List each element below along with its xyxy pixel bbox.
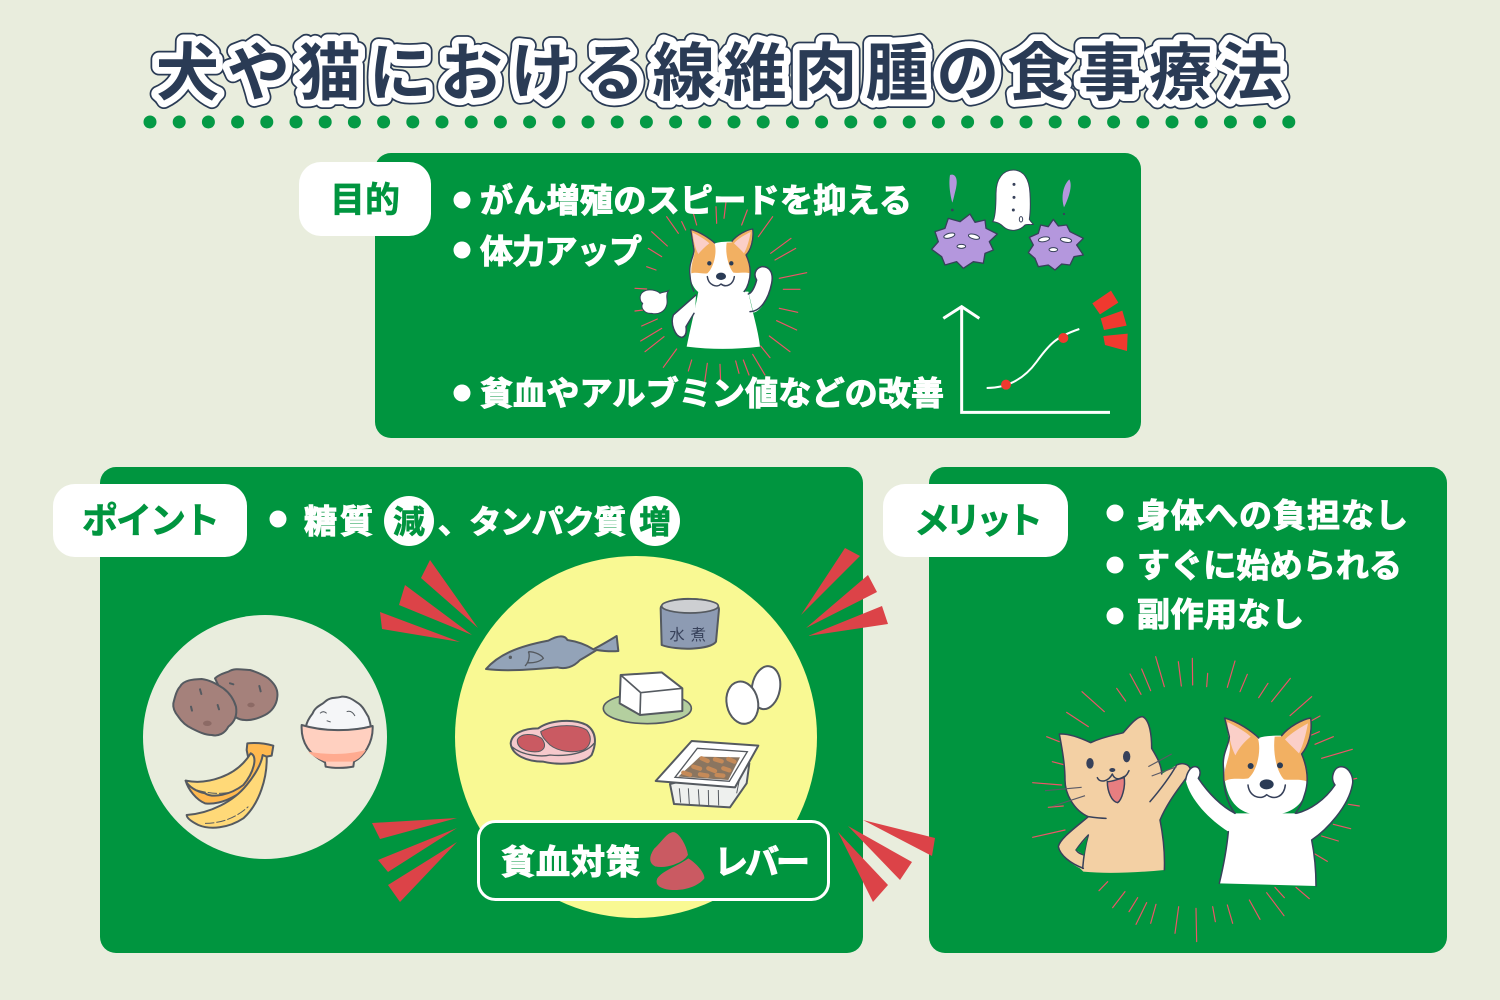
icon: canned tuna: 水煮 bbox=[669, 627, 706, 644]
icon: red emphasis wedges bbox=[372, 548, 935, 902]
icon: eggs bbox=[723, 664, 784, 727]
panel: points bbox=[53, 467, 863, 953]
callout: liver for anemia: レバー bbox=[714, 844, 810, 882]
icon: tofu bbox=[603, 672, 691, 724]
merit text: no burden: 身体への負担なし bbox=[1137, 497, 1408, 534]
circle: foods to reduce bbox=[143, 615, 387, 859]
point text: less sugar, more protein: 糖質 bbox=[304, 503, 373, 540]
icon: canned tuna bbox=[661, 599, 719, 649]
icon: meat bbox=[511, 721, 595, 764]
panel: merits bbox=[883, 467, 1447, 953]
title: 犬や猫における線維肉腫の食事療法 bbox=[156, 39, 1283, 109]
cat bbox=[1045, 717, 1190, 873]
illustration: weakened cancer cells bbox=[932, 170, 1083, 270]
point text: less sugar, more protein: 、タンパク質 bbox=[438, 504, 626, 540]
label: merits: メリット bbox=[914, 500, 1043, 541]
icon: fish bbox=[486, 636, 618, 670]
icon: liver bbox=[650, 832, 704, 890]
callout: liver for anemia: 貧血対策 bbox=[501, 844, 640, 882]
chart: rising line bbox=[943, 291, 1128, 412]
merit text: start right away: すぐに始められる bbox=[1137, 547, 1402, 584]
icon: bananas bbox=[186, 743, 273, 828]
label: merits bbox=[883, 484, 1068, 557]
callout: liver for anemia bbox=[478, 822, 828, 900]
label: points bbox=[53, 484, 247, 557]
purpose text: slow cancer growth: がん増殖のスピードを抑える bbox=[480, 182, 912, 219]
point text: less sugar, more protein: 増 bbox=[639, 504, 671, 540]
label: purpose bbox=[299, 162, 431, 236]
label: points: ポイント bbox=[82, 500, 220, 541]
illustration: cat and dog high five bbox=[1033, 657, 1359, 942]
label: purpose: 目的 bbox=[330, 181, 400, 220]
purpose text: build strength: 体力アップ bbox=[480, 233, 642, 270]
title: 犬や猫における線維肉腫の食事療法 bbox=[156, 39, 1283, 109]
merit text: no side effects: 副作用なし bbox=[1137, 596, 1304, 633]
illustration: proud corgi bbox=[635, 202, 807, 387]
panel: purpose bbox=[299, 153, 1141, 438]
purpose text: improve anemia and albumin: 貧血やアルブミン値などの改善 bbox=[480, 375, 944, 412]
point text: less sugar, more protein: 減 bbox=[393, 504, 425, 540]
icon: natto bbox=[656, 741, 758, 807]
dog bbox=[1186, 718, 1353, 886]
title: 犬や猫における線維肉腫の食事療法 bbox=[156, 39, 1283, 109]
icon: potatoes bbox=[173, 669, 277, 735]
circle: foods to increase bbox=[455, 556, 817, 918]
icon: rice bowl bbox=[302, 697, 373, 768]
point text: less sugar, more protein bbox=[270, 496, 680, 546]
